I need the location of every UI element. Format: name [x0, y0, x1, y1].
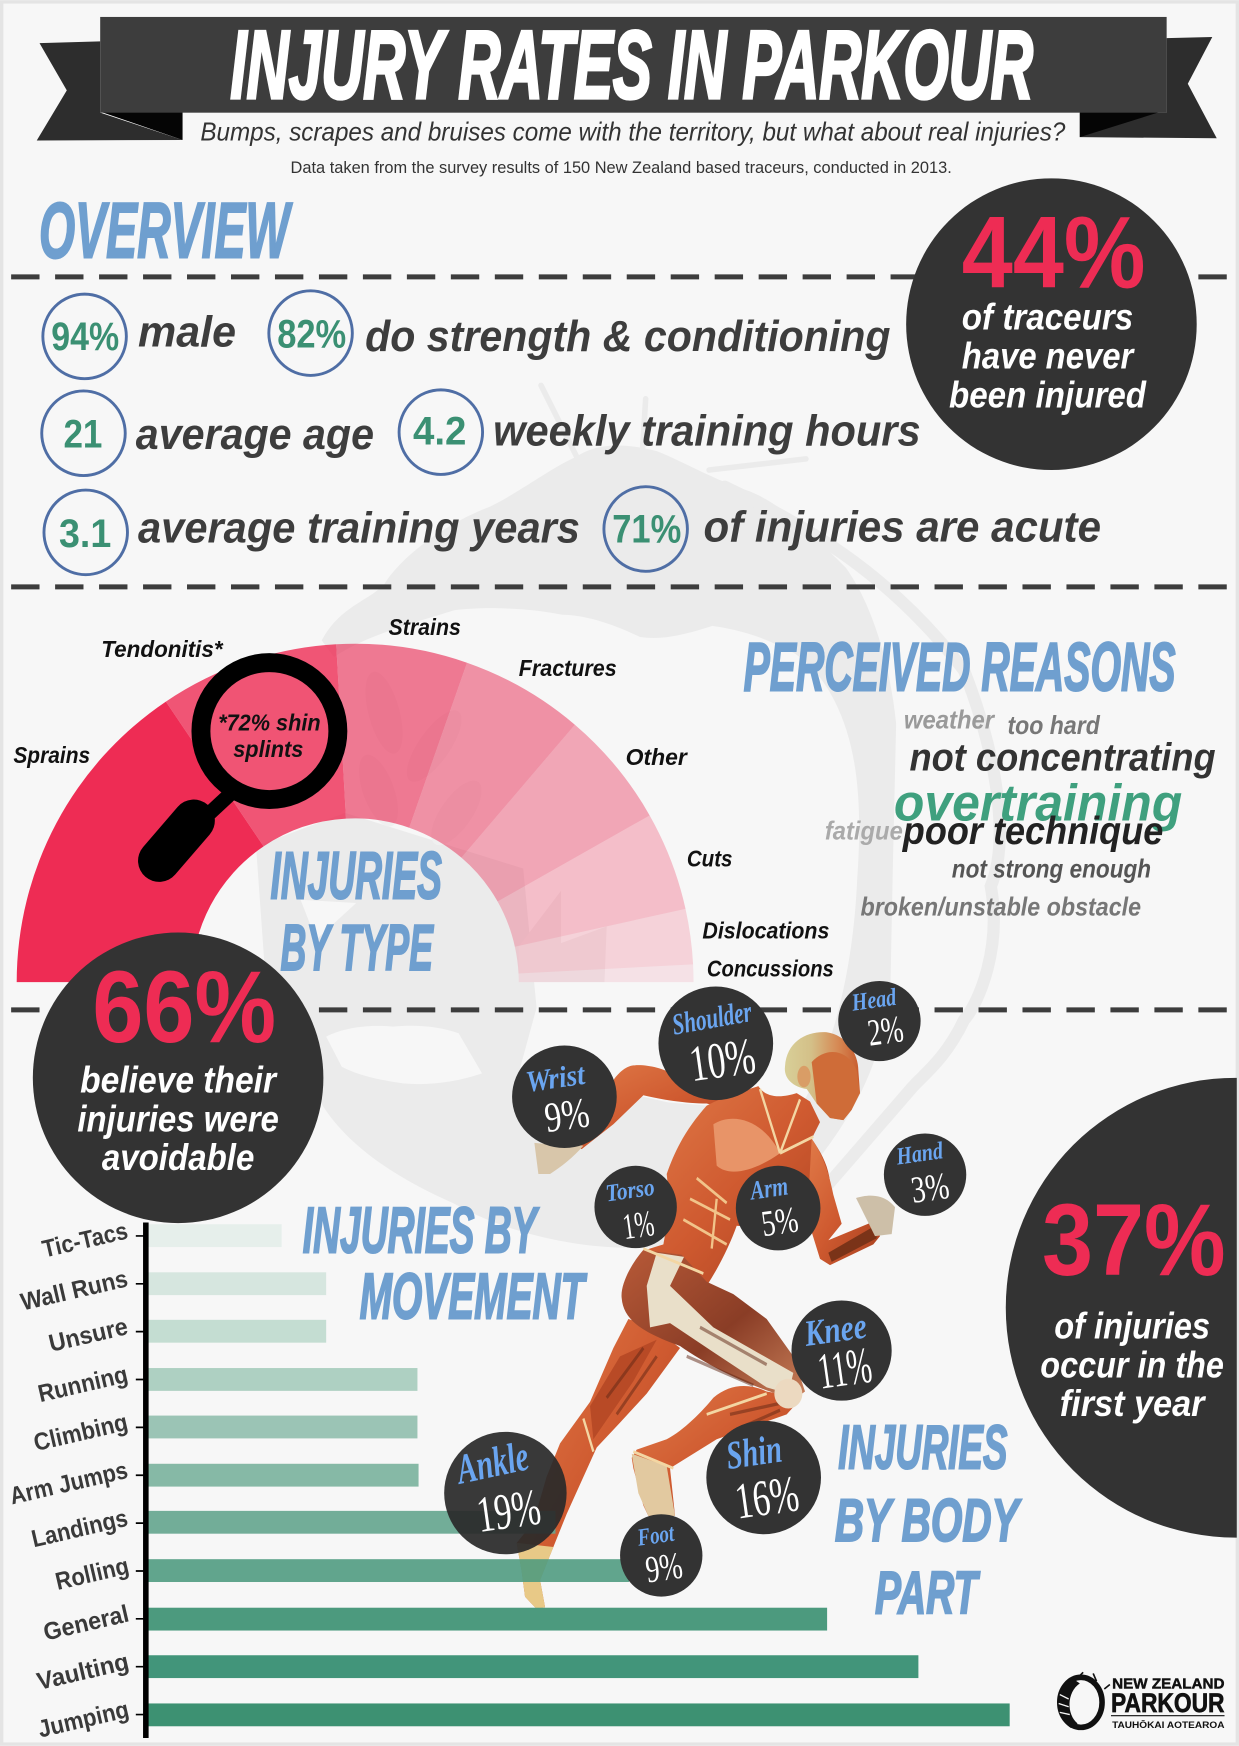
- stat: 3.1 average training years: 3.1: [59, 512, 111, 556]
- stat: 71% acute injuries: of injuries are acute: [704, 503, 1101, 551]
- body part: head 2%: Head: [849, 984, 898, 1017]
- callout: 44% never injured: have never: [962, 336, 1135, 377]
- body part: shoulder 10%: [658, 987, 773, 1100]
- back hand: [534, 1143, 583, 1174]
- wedge: concussions: [519, 964, 694, 982]
- torso: [643, 1086, 830, 1286]
- body part: shoulder 10%: 10%: [686, 1028, 759, 1093]
- movement labels: Rolling: [53, 1553, 132, 1596]
- logo ring with fern: [1059, 1672, 1110, 1728]
- body part: torso 1%: [594, 1166, 677, 1248]
- watermark: fern ring logo: [256, 385, 1000, 1248]
- chart: injuries by movement: [7, 1218, 1010, 1743]
- logo: New Zealand Parkour: TAUHŌKAI AOTEAROA: [1112, 1720, 1225, 1730]
- stat: 21 average age: 21: [63, 413, 102, 457]
- heading: injuries by body part: [835, 1414, 1022, 1626]
- body part: hand 3%: Hand: [894, 1137, 945, 1171]
- body part: shin 16%: Shin: [723, 1426, 785, 1478]
- body part: knee 11%: 11%: [814, 1337, 875, 1401]
- labels: injury types: Other: [626, 744, 689, 770]
- callout: 44% never injured: of traceurs: [962, 297, 1133, 338]
- movement labels: Jumping: [35, 1696, 132, 1743]
- body part: shin 16%: [706, 1421, 821, 1534]
- body part: arm 5%: 5%: [759, 1198, 801, 1244]
- callout: 66% avoidable: injuries were: [77, 1098, 279, 1139]
- body part: shoulder 10%: Shoulder: [669, 994, 754, 1042]
- wedge: fractures: [409, 663, 575, 858]
- heading: injuries by movement: MOVEMENT: [360, 1260, 587, 1332]
- stat: 82% strength and conditioning: 82%: [277, 313, 346, 357]
- labels: injury types: Strains: [389, 614, 461, 640]
- heading: injuries by type: INJURIES: [271, 840, 442, 914]
- movement labels: Arm Jumps: [7, 1457, 130, 1510]
- body part: arm 5%: [736, 1166, 820, 1250]
- panel: overview stats: [42, 291, 1101, 575]
- stat: 3.1 average training years: average training years: [138, 504, 580, 552]
- movement labels: Climbing: [31, 1409, 130, 1457]
- labels: injury types: Concussions: [707, 956, 834, 982]
- logo wordmark: NEW ZEALAND: [1112, 1676, 1225, 1692]
- wedge: cuts: [498, 815, 686, 947]
- heading: injuries by body part: PART: [875, 1559, 980, 1626]
- muscle fibre shading: [607, 1327, 787, 1431]
- wedge: dislocations: [515, 909, 693, 974]
- callout: 66% avoidable: [33, 933, 323, 1223]
- callout: 66% avoidable: believe their: [80, 1059, 278, 1100]
- body part: foot 9%: [620, 1514, 702, 1597]
- heading: injuries by body part: BY BODY: [835, 1487, 1022, 1554]
- callout: 37% first year: first year: [1060, 1383, 1206, 1424]
- callout: 37% first year: of injuries: [1054, 1305, 1210, 1346]
- heading: injuries by movement: [303, 1195, 587, 1332]
- stat: 94% male: 94%: [51, 315, 119, 359]
- body part: knee 11%: [791, 1300, 892, 1401]
- labels: injury types: [13, 614, 834, 982]
- word cloud: perceived reasons: poor technique: [902, 810, 1163, 853]
- body part: wrist 9%: [512, 1046, 617, 1148]
- stat: 3.1 average training years: [44, 490, 580, 575]
- banner left tail: [37, 41, 183, 141]
- abdominal muscles: [683, 1178, 730, 1249]
- movement labels: Vaulting: [34, 1648, 132, 1696]
- wedge: tendonitis: [166, 644, 346, 846]
- body part: shin 16%: 16%: [732, 1465, 802, 1531]
- head: [785, 1032, 860, 1120]
- word cloud: perceived reasons: [825, 706, 1216, 921]
- front arm: [808, 1139, 880, 1265]
- icon: magnifying glass with shin splints note: *72% shin: [218, 710, 321, 736]
- callout: 44% never injured: 44%: [962, 194, 1145, 309]
- body part: knee 11%: Knee: [801, 1305, 869, 1354]
- labels: injury types: Sprains: [13, 742, 90, 768]
- body part: ankle 19%: Ankle: [450, 1433, 533, 1494]
- labels: injury types: Cuts: [687, 845, 732, 871]
- chart: injuries by type fan: [13, 614, 834, 982]
- muscle tendon lines: [583, 1089, 813, 1468]
- back calf shading: [590, 1340, 657, 1439]
- knee: [774, 1379, 802, 1409]
- title banner: [37, 10, 1217, 141]
- stat: 21 average age: [42, 391, 374, 476]
- stat: 94% male: [43, 294, 236, 379]
- heading: injuries by type: BY TYPE: [281, 912, 434, 984]
- movement labels: Landings: [29, 1505, 130, 1553]
- movement labels: General: [41, 1601, 132, 1646]
- face muscles: [812, 1052, 860, 1120]
- subtitle: Bumps, scrapes and bruises come with the territory, but what about real injuries?: [200, 119, 1066, 147]
- callout: 66% avoidable: avoidable: [102, 1137, 254, 1178]
- heading: injuries by movement: INJURIES BY: [303, 1195, 539, 1267]
- movement labels: Tic-Tacs: [40, 1218, 130, 1264]
- body part: arm 5%: Arm: [747, 1171, 790, 1206]
- illustration: muscular runner: [517, 1032, 895, 1609]
- thigh: [622, 1250, 805, 1400]
- callout: 37% first year: [1006, 1078, 1239, 1538]
- hip tendon: [647, 1253, 793, 1394]
- stat: 4.2 weekly training hours: [399, 390, 921, 474]
- banner right tail: [1080, 37, 1217, 138]
- icon: magnifying glass with shin splints note: [159, 663, 338, 861]
- body part: torso 1%: 1%: [620, 1202, 657, 1247]
- icon: magnifying glass with shin splints note: splints: [233, 736, 303, 762]
- stat: 4.2 weekly training hours: 4.2: [413, 409, 466, 453]
- axis: [136, 1223, 146, 1738]
- body part: hand 3%: [884, 1133, 966, 1216]
- back arm: [568, 1065, 753, 1149]
- body part: hand 3%: 3%: [908, 1165, 952, 1212]
- body part: ankle 19%: 19%: [473, 1479, 544, 1544]
- banner right fold: [1080, 112, 1161, 137]
- word cloud: perceived reasons: not concentrating: [909, 737, 1216, 780]
- body part: wrist 9%: Wrist: [524, 1057, 588, 1099]
- back foot highlight: [517, 1543, 553, 1609]
- wedge: other: [461, 725, 650, 901]
- wedge: sprains: [17, 702, 264, 982]
- body part: foot 9%: Foot: [635, 1520, 677, 1552]
- word cloud: perceived reasons: not strong enough: [952, 855, 1151, 883]
- stat: 94% male: male: [138, 308, 236, 356]
- body part: torso 1%: Torso: [604, 1174, 656, 1207]
- word cloud: perceived reasons: weather: [904, 706, 996, 734]
- stat: 4.2 weekly training hours: weekly training hours: [493, 408, 921, 456]
- labels: injury types: Dislocations: [702, 918, 829, 944]
- data source note: Data taken from the survey results of 150 New Zealand based traceurs, conducted in 2013.: [291, 158, 952, 177]
- labels: injury types: Tendonitis*: [101, 636, 224, 662]
- movement labels: Running: [35, 1361, 130, 1408]
- chest muscle: [713, 1119, 780, 1172]
- body part: foot 9%: 9%: [643, 1545, 685, 1591]
- heading: injuries by body part: INJURIES: [838, 1414, 1007, 1483]
- stat: 82% strength and conditioning: do strength & conditioning: [365, 313, 891, 361]
- movement labels: Wall Runs: [18, 1266, 130, 1316]
- ear: [797, 1066, 811, 1087]
- banner ribbon: [100, 17, 1167, 113]
- body part: wrist 9%: 9%: [542, 1089, 592, 1142]
- heading: overview: OVERVIEW: [39, 185, 293, 274]
- stat: 21 average age: average age: [136, 411, 374, 459]
- word cloud: perceived reasons: broken/unstable obstacle: [861, 893, 1141, 921]
- body part: ankle 19%: [444, 1432, 567, 1554]
- banner left fold: [100, 112, 183, 140]
- labels: injury types: Fractures: [519, 655, 617, 681]
- word cloud: perceived reasons: fatigue: [825, 818, 903, 846]
- front hand: [856, 1196, 895, 1236]
- stat: 82% strength and conditioning: [269, 291, 891, 375]
- word cloud: perceived reasons: overtraining: [894, 775, 1182, 833]
- wedge: strains: [336, 644, 467, 828]
- front shin: [632, 1386, 802, 1516]
- word cloud: perceived reasons: too hard: [1007, 712, 1101, 740]
- callout: 44% never injured: [906, 178, 1197, 470]
- callout: 66% avoidable: 66%: [92, 949, 276, 1064]
- bars: [148, 1224, 1010, 1726]
- stat: 71% acute injuries: 71%: [612, 507, 681, 551]
- body part: head 2%: 2%: [865, 1008, 906, 1055]
- heading: injuries by type: [271, 840, 442, 984]
- movement labels: Unsure: [46, 1313, 130, 1358]
- back leg: [517, 1319, 680, 1609]
- movement labels: [7, 1218, 132, 1743]
- forearm shading: [828, 1226, 877, 1262]
- stat: 71% acute injuries: [604, 487, 1101, 571]
- front foot: [632, 1454, 675, 1516]
- dashed dividers: [11, 277, 1227, 1010]
- callout: 44% never injured: been injured: [949, 375, 1147, 416]
- logo: New Zealand Parkour: [1059, 1672, 1225, 1730]
- body part: head 2%: [838, 981, 921, 1061]
